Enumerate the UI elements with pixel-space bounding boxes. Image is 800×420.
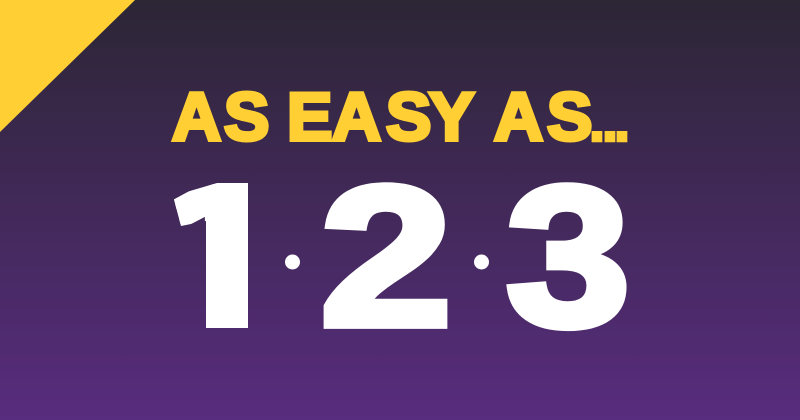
numeral 1: 1 <box>152 138 291 372</box>
corner triangle <box>0 0 135 132</box>
numeral 3: 3 <box>506 145 630 367</box>
heading: AS EASY AS <box>0 79 592 155</box>
separator dot 1 <box>285 254 300 270</box>
separator dot 2 <box>474 254 489 270</box>
numeral 2: 2 <box>320 146 452 368</box>
heading ellipsis: ... <box>587 78 632 158</box>
